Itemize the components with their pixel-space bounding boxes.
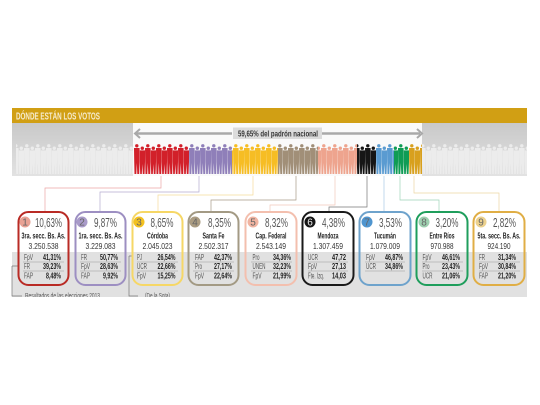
panel: card 6: [302, 212, 354, 285]
panel: card 3: 22,66%: [158, 262, 176, 271]
panel: card 6: Mendoza: [318, 230, 339, 240]
panel: card 9: 2,82%: [493, 215, 516, 230]
panel: card 1: FpV: [24, 253, 33, 262]
panel: card 8: [416, 212, 468, 285]
panel: card 5: 5: [250, 218, 256, 228]
panel: card 8: 23,43%: [442, 262, 460, 271]
panel: card 9: 9: [478, 218, 484, 228]
panel: card 1: 3.250.538: [28, 241, 59, 251]
silhouettes chart: [16, 144, 527, 175]
panel: card 1: 3ra. secc. Bs. As.: [22, 230, 66, 240]
panel: card 7: 46,87%: [385, 253, 403, 262]
panel: card 7: 7: [364, 218, 370, 228]
panel: card 6: 47,72: [332, 253, 346, 262]
panel: card 8: 46,61%: [442, 253, 460, 262]
panel: card 8: UCR: [422, 272, 433, 280]
footnote: de la sota: (De la Sota): [145, 293, 170, 300]
panel: card 5: [246, 212, 296, 285]
panel: card 1: 1: [22, 218, 28, 228]
panel: card 4: 2.502.317: [198, 241, 229, 251]
panel: card 3: Córdoba: [147, 230, 168, 240]
panel: card 4: FpV: [195, 272, 204, 280]
panel: card 5: 32,23%: [273, 262, 291, 271]
panel: card 9: [474, 212, 524, 285]
header bar: [12, 108, 527, 123]
panel: card 7: 34,86%: [385, 262, 403, 271]
panel: card 4: 42,37%: [214, 253, 232, 262]
panel: card 7: [360, 212, 410, 285]
panel: card 2: FpV: [81, 262, 90, 271]
panel: card 5: UNEN: [252, 262, 266, 271]
panel: card 7: FpV: [366, 253, 375, 262]
results band: [0, 252, 540, 305]
panel: card 9: 30,84%: [498, 262, 516, 271]
panel: card 6: FpV: [308, 262, 317, 271]
panel: card 2: 9,92%: [103, 272, 118, 280]
panel: card 8: 21,06%: [442, 272, 460, 280]
panel: card 1: 41,31%: [43, 253, 61, 262]
panel: card 8: 8: [421, 218, 427, 228]
panel: card 3: UCR: [137, 262, 147, 271]
panel: card 2: 3.229.083: [86, 241, 116, 251]
footnote: results: Resultados de las elecciones 2013: [25, 293, 100, 300]
panel: card 8: Pro: [422, 262, 430, 271]
panel: card 6: 27,13: [332, 262, 346, 271]
arrow: national roll span: [135, 128, 422, 139]
panel: card 3: 15,25%: [158, 272, 176, 280]
panel: card 6: 1.307.459: [313, 241, 343, 251]
panel: card 6: 6: [307, 218, 313, 228]
panel: card 1: 39,23%: [43, 262, 61, 271]
panel: card 9: FR: [479, 253, 485, 262]
panel: card 4: FAP: [195, 253, 204, 262]
panel: card 7: 1.079.009: [370, 241, 400, 251]
panel: card 4: 27,17%: [214, 262, 232, 271]
panel: card 7: Tucumán: [374, 230, 396, 240]
panel: card 2: 50,77%: [100, 253, 118, 262]
panel: card 3: PJ: [137, 253, 142, 262]
panel: card 5: 2.543.149: [256, 241, 286, 251]
panel: card 3: 3: [136, 218, 142, 228]
panel: card 3: 8,65%: [150, 215, 174, 230]
panel: padron backdrop: [12, 123, 527, 176]
panel: card 5: Cap. Federal: [256, 230, 286, 240]
label: national share: 59,65% del padrón nacional: [238, 128, 318, 138]
panel: card 2: [76, 212, 126, 285]
panel: card 9: 21,20%: [498, 272, 516, 280]
panel: card 8: 970.988: [430, 241, 454, 251]
panel: card 3: [132, 212, 182, 285]
panel: card 4: 8,35%: [208, 215, 231, 230]
panel: card 9: FAP: [479, 272, 488, 280]
panel: card 2: FR: [81, 253, 87, 262]
panel: card 2: 9,87%: [94, 215, 117, 230]
panel: card 8: Entre Ríos: [430, 230, 455, 240]
panel: card 3: 2.045.023: [142, 241, 173, 251]
panel: card 4: [188, 212, 238, 285]
panel: card 4: 4: [192, 218, 198, 228]
panel: card 6: 14,03: [332, 272, 346, 280]
panel: card 7: UCR: [366, 262, 376, 271]
panel: card 2: FAP: [81, 272, 90, 280]
panel: card 4: Santa Fe: [202, 230, 225, 240]
panel: card 4: Pro: [195, 262, 202, 271]
panel: card 1: 8,48%: [46, 272, 61, 280]
panel: card 9: 924.190: [488, 241, 511, 251]
panel: card 9: 31,34%: [498, 253, 516, 262]
panel: card 9: FpV: [479, 262, 488, 271]
panel: card 3: 26,54%: [158, 253, 176, 262]
panel: card 2: 1ra. secc. Bs. As.: [78, 230, 122, 240]
panel: card 1: 10,63%: [35, 215, 62, 230]
panel: card 1: FAP: [24, 272, 33, 280]
panel: card 7: 3,53%: [379, 215, 402, 230]
panel: card 2: 28,63%: [100, 262, 118, 271]
panel: card 5: FpV: [252, 272, 262, 280]
panel: card 6: UCR: [308, 253, 318, 262]
panel: card 8: FpV: [422, 253, 432, 262]
panel: card 5: Pro: [252, 253, 260, 262]
panel: card 3: FpV: [137, 272, 146, 280]
panel: card 5: 34,36%: [273, 253, 291, 262]
panel: card 1: [18, 212, 68, 285]
panel: card 5: 8,32%: [265, 215, 288, 230]
panel: card 6: Fte. Izq.: [308, 272, 324, 280]
panel: card 6: 4,38%: [322, 215, 345, 230]
panel: card 8: 3,20%: [436, 215, 459, 230]
panel: card 2: 2: [79, 218, 85, 228]
heading: DÓNDE ESTÁN LOS VOTOS: [16, 110, 100, 122]
panel: card 5: 21,99%: [273, 272, 291, 280]
connector lines: [45, 176, 499, 211]
panel: card 1: FR: [24, 262, 30, 271]
panel: card 4: 22,64%: [214, 272, 232, 280]
